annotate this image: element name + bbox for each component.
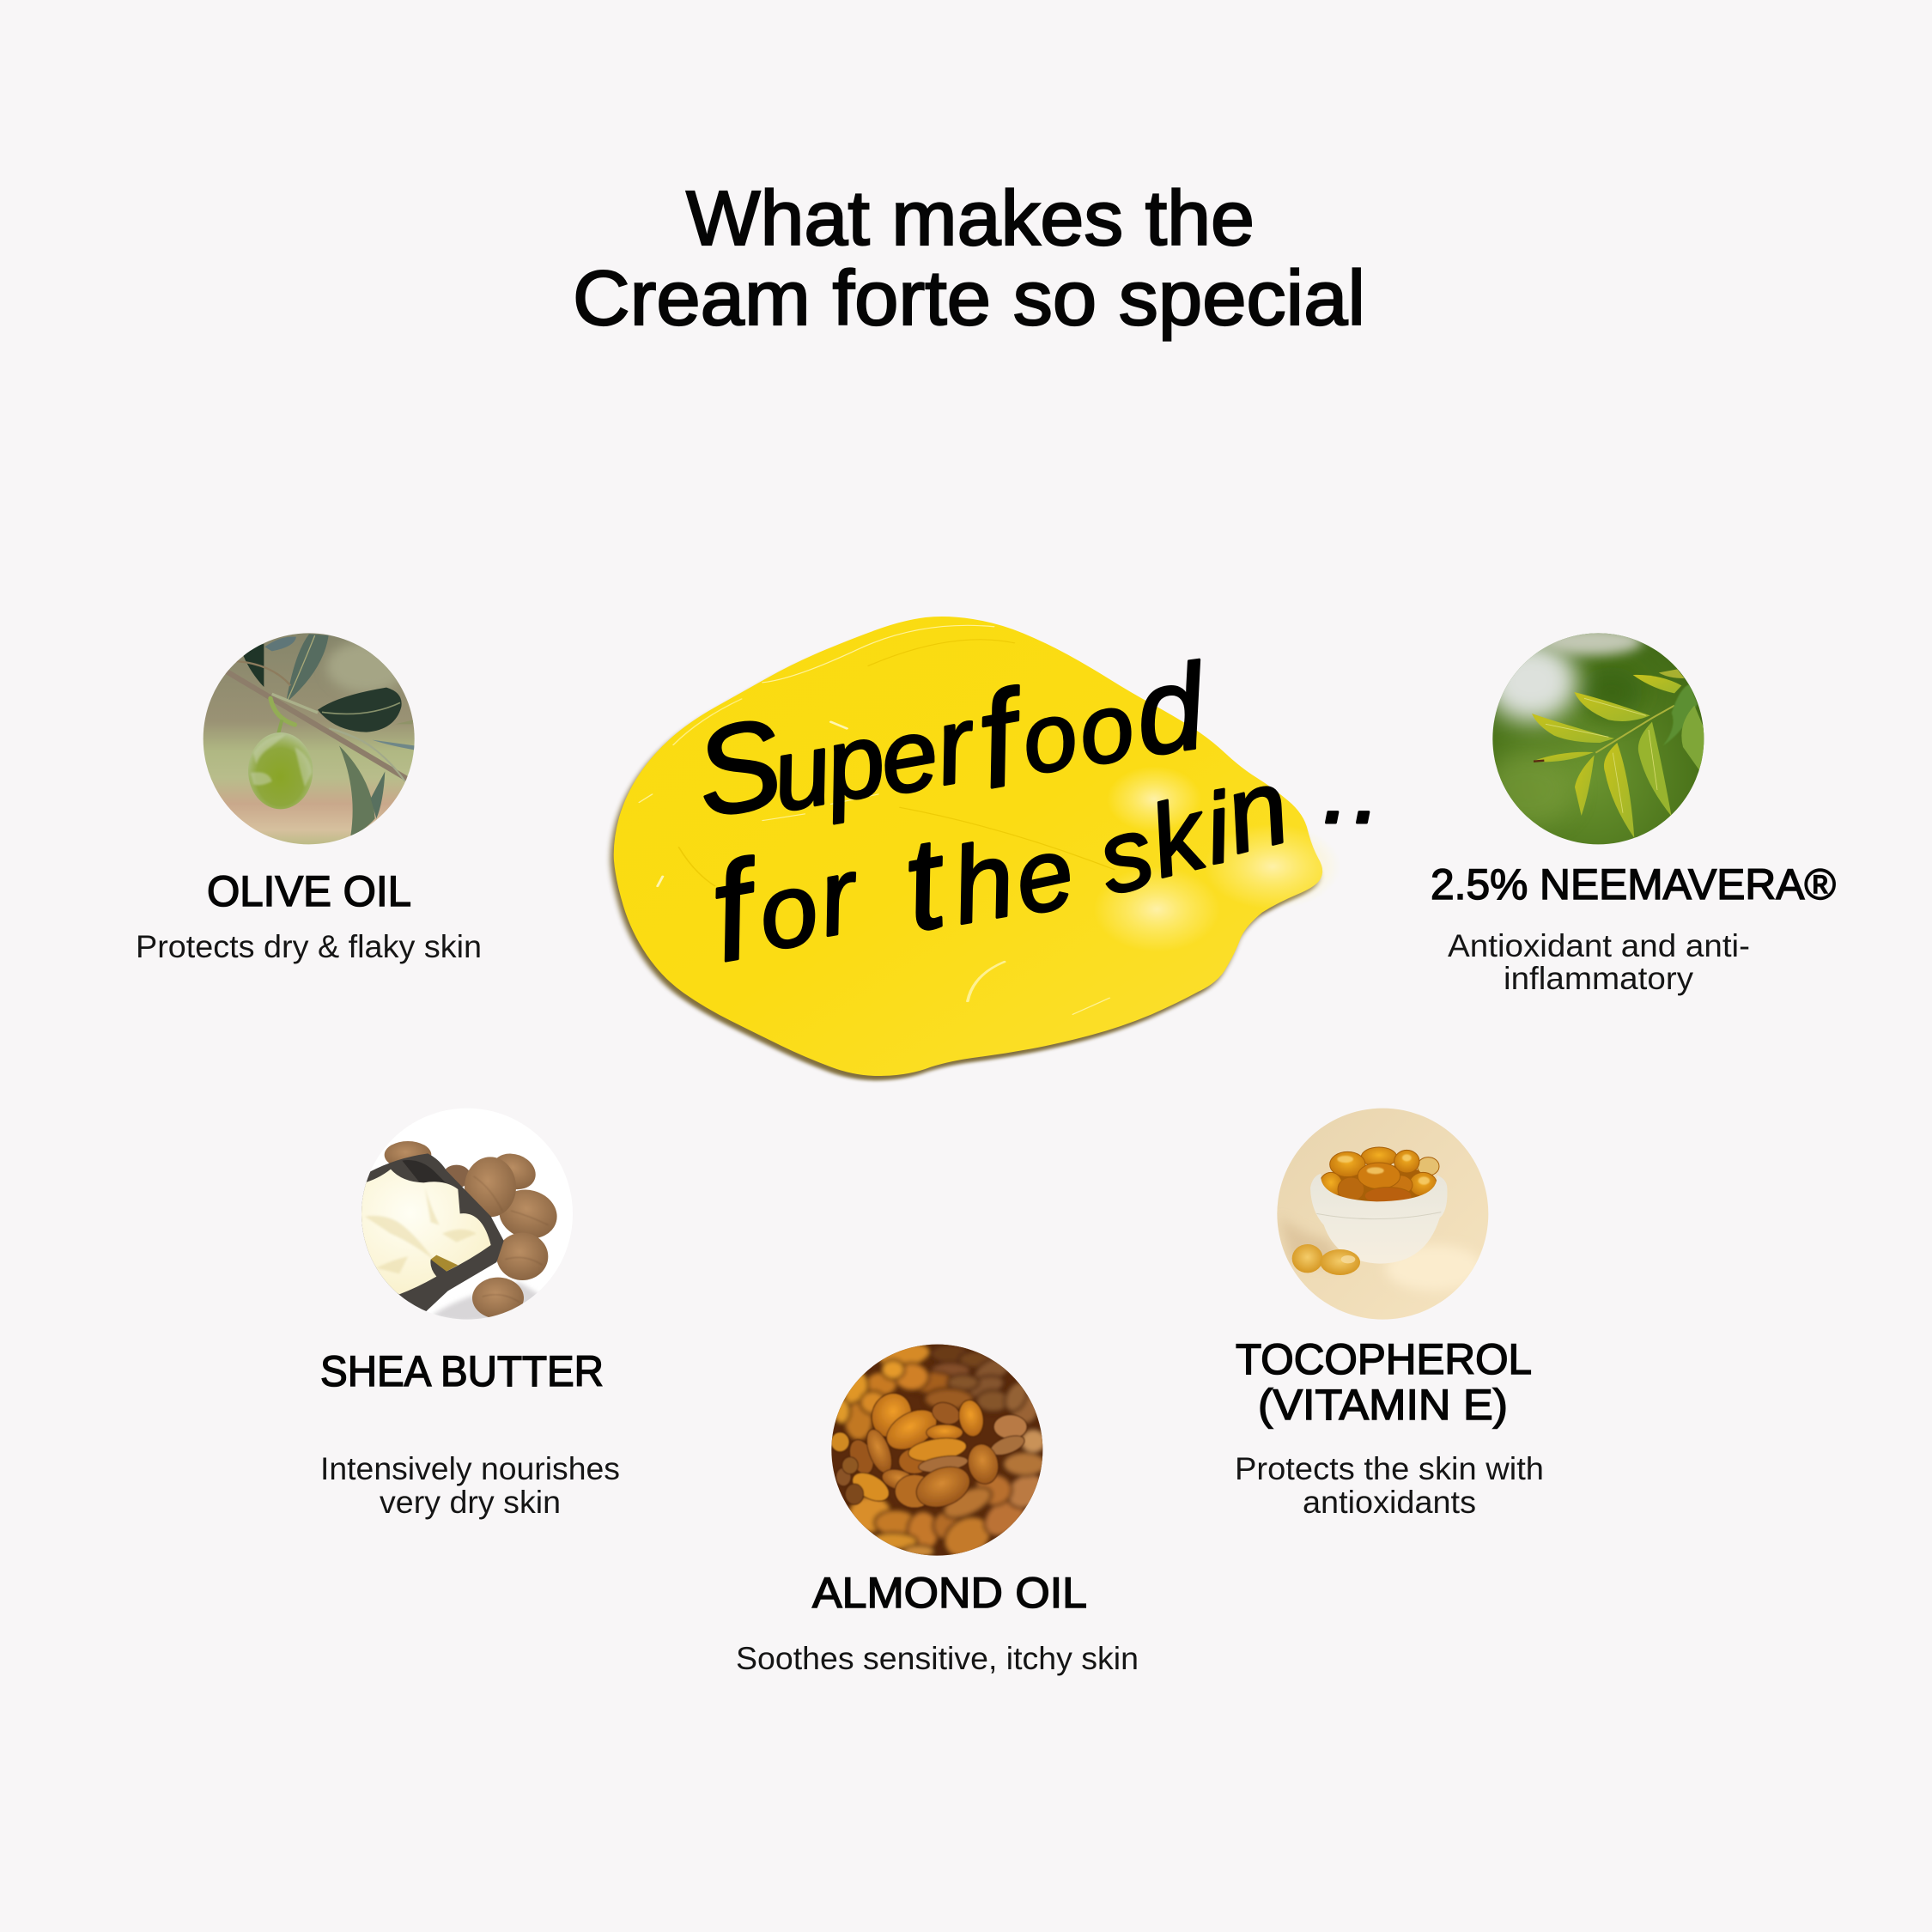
handwritten text: i <box>1197 773 1241 885</box>
handwritten text: o <box>1070 671 1142 787</box>
handwritten text: u <box>764 712 839 834</box>
handwritten text: h <box>944 819 1023 947</box>
handwritten text: e <box>872 696 946 817</box>
text: Antioxidant and anti- <box>1448 928 1750 963</box>
text: Protects the skin with <box>1235 1451 1544 1486</box>
icon: olive photo <box>200 629 418 848</box>
handwritten text: s <box>1087 794 1164 916</box>
handwritten text: . <box>1322 734 1350 844</box>
handwritten text: r <box>927 683 986 808</box>
icon: neem leaf photo <box>1492 633 1704 845</box>
panel: shea butter <box>320 1102 620 1520</box>
text: Intensively nourishes <box>320 1451 620 1486</box>
text: antioxidants <box>1303 1485 1476 1520</box>
handwritten text: k <box>1139 776 1219 899</box>
handwritten text: p <box>814 701 893 824</box>
panel: tocopherol <box>1235 1105 1544 1520</box>
heading: (VITAMIN E) <box>1258 1381 1508 1429</box>
cream swatch with handwriting <box>611 617 1381 1080</box>
heading <box>1236 1335 1532 1429</box>
heading: SHEA BUTTER <box>320 1347 604 1395</box>
heading: OLIVE OIL <box>207 867 411 915</box>
handwritten text: r <box>810 835 869 959</box>
title: Cream forte so special <box>573 256 1365 342</box>
handwritten text: . <box>1353 734 1381 844</box>
handwritten text: f <box>700 830 776 990</box>
heading: ALMOND OIL <box>812 1569 1087 1617</box>
text: Soothes sensitive, itchy skin <box>736 1641 1139 1676</box>
text: very dry skin <box>380 1485 561 1520</box>
handwritten text <box>685 638 1381 990</box>
handwritten text: n <box>1213 746 1300 876</box>
text <box>1448 928 1750 996</box>
handwritten text: o <box>1013 680 1085 795</box>
text: inflammatory <box>1504 961 1694 996</box>
yellow cream blob <box>611 617 1341 1080</box>
icon: shea butter photo <box>361 1109 573 1319</box>
title: What makes the <box>686 176 1255 262</box>
handwritten text: d <box>1127 638 1215 781</box>
heading: TOCOPHEROL <box>1236 1335 1532 1383</box>
handwritten text: e <box>1005 815 1084 937</box>
icon: vitamin E capsules photo <box>1277 1108 1489 1320</box>
title <box>573 176 1365 342</box>
text <box>1235 1451 1544 1520</box>
panel: neemavera <box>1431 627 1836 996</box>
text: Protects dry & flaky skin <box>136 929 482 964</box>
text <box>320 1451 620 1520</box>
heading: 2.5% NEEMAVERA® <box>1431 860 1836 908</box>
handwritten text: t <box>893 809 958 958</box>
handwritten text: S <box>685 692 792 844</box>
icon: almonds photo <box>831 1345 1042 1556</box>
panel: olive oil <box>136 629 482 964</box>
handwritten text: f <box>967 661 1041 816</box>
handwritten text: o <box>750 849 826 973</box>
panel: almond oil <box>736 1339 1139 1676</box>
